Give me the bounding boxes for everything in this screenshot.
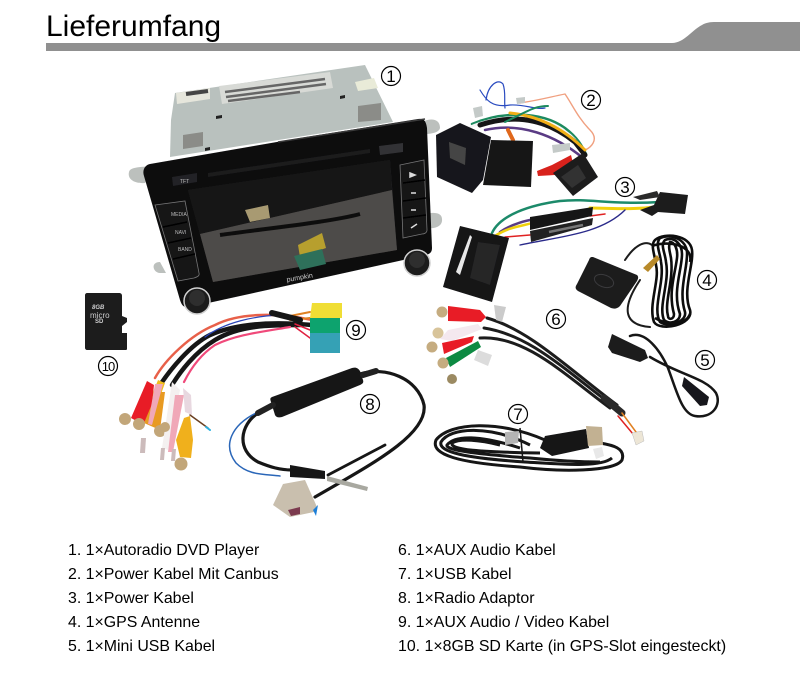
item 10: 8GB SD card: 8GB [92, 305, 105, 311]
list: right column: 9. 1×AUX Audio / Video Kabel [398, 614, 609, 631]
item 7: USB cable: 7 [513, 405, 523, 424]
item 1: DVD player: MEDIA [171, 212, 188, 218]
item 6: AUX audio cable: 6 [551, 310, 561, 329]
title: Lieferumfang [46, 10, 221, 43]
item 2: power cable with canbus [436, 82, 600, 196]
item 10: 8GB SD card [85, 293, 127, 376]
list: right column: 6. 1×AUX Audio Kabel [398, 542, 556, 559]
item 3: power cable: 3 [620, 178, 630, 197]
item 8: radio adaptor [230, 368, 424, 517]
number 1: 1 [386, 67, 396, 86]
list: right column: 7. 1×USB Kabel [398, 566, 512, 583]
header bar [46, 22, 800, 51]
item 4: GPS antenna [576, 236, 716, 327]
item 2: power cable with canbus: 2 [586, 91, 596, 110]
item 1: DVD player: NAVI [175, 230, 186, 236]
list: left column: 4. 1×GPS Antenne [68, 614, 200, 631]
item 10: 8GB SD card: micro [90, 311, 110, 320]
item 5: mini USB cable: 5 [700, 351, 710, 370]
item 1: DVD player: pumpkin [286, 272, 314, 284]
list: right column: 10. 1×8GB SD Karte (in GPS-Slot eingesteckt) [398, 638, 726, 655]
item 9: AUX audio / video cable [119, 303, 366, 470]
list: left column: 3. 1×Power Kabel [68, 590, 194, 607]
list: left column: 5. 1×Mini USB Kabel [68, 638, 215, 655]
item 9: AUX audio / video cable: 9 [351, 321, 361, 340]
list: left column: 2. 1×Power Kabel Mit Canbus [68, 566, 279, 583]
list: left column: 1. 1×Autoradio DVD Player [68, 542, 260, 559]
item 1: DVD player: BAND [178, 247, 192, 253]
item 1: DVD player: TFT [180, 179, 189, 185]
item 6: AUX audio cable [426, 305, 644, 445]
item 7: USB cable [435, 404, 623, 470]
item 8: radio adaptor: 8 [365, 395, 375, 414]
item 3: power cable [443, 178, 688, 302]
item 10: 8GB SD card: SD [95, 319, 104, 325]
item 10: 8GB SD card: 10 [102, 359, 115, 374]
item 1: DVD player [129, 65, 442, 314]
item 5: mini USB cable [608, 334, 718, 416]
item 4: GPS antenna: 4 [702, 271, 712, 290]
number 1 [382, 66, 400, 86]
list: right column [398, 542, 726, 655]
list: right column: 8. 1×Radio Adaptor [398, 590, 535, 607]
list: left column [68, 542, 279, 655]
